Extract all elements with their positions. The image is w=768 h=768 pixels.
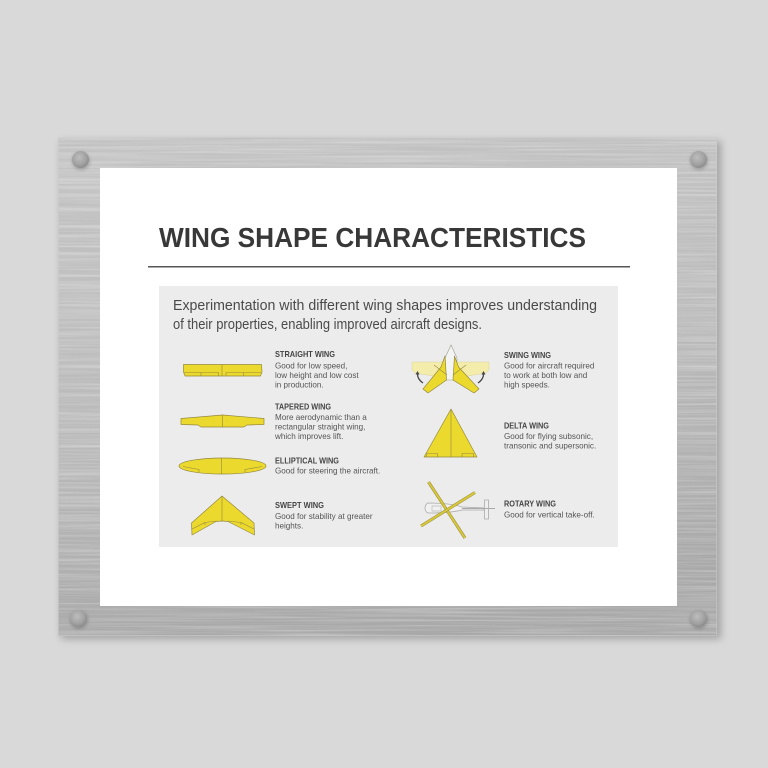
bolt: top right: [690, 151, 708, 170]
icon: rotary wing: [421, 482, 495, 538]
icon: swept wing: [192, 496, 254, 535]
text: tapered wing: which improves lift.: [274, 432, 343, 441]
text: elliptical wing: Good for steering the aircraft.: [275, 466, 380, 476]
bolt: bottom left: [70, 610, 88, 629]
title rule: [148, 266, 630, 268]
icon: tapered wing: [181, 415, 264, 428]
plate shadow: [61, 141, 721, 639]
text: straight wing: in production.: [275, 380, 324, 390]
text: delta wing: DELTA WING: [504, 422, 549, 430]
text: straight wing: STRAIGHT WING: [275, 350, 335, 359]
text: tapered wing: TAPERED WING: [275, 402, 331, 412]
text: delta wing: [504, 422, 596, 450]
text: tapered wing: [274, 402, 367, 441]
text: tapered wing: More aerodynamic than a: [275, 413, 367, 422]
text: straight wing: [275, 350, 359, 390]
bolt: bottom right: [690, 610, 708, 629]
text: rotary wing: ROTARY WING: [504, 500, 556, 508]
icon: straight wing: [184, 364, 262, 376]
icon: elliptical wing: [179, 458, 266, 474]
text: delta wing: Good for flying subsonic,: [504, 432, 593, 441]
text: elliptical wing: [275, 456, 380, 476]
text: swept wing: Good for stability at greater: [275, 512, 373, 521]
intro text: Experimentation with different wing shapes improves understanding: [173, 298, 597, 314]
bolt: top left: [72, 151, 90, 170]
text: swing wing: to work at both low and: [504, 371, 587, 380]
text: tapered wing: rectangular straight wing,: [275, 422, 365, 432]
text: swept wing: [275, 501, 373, 530]
text: swept wing: heights.: [275, 522, 303, 530]
text: delta wing: transonic and supersonic.: [504, 442, 596, 450]
text: swing wing: Good for aircraft required: [504, 362, 594, 370]
text: swing wing: high speeds.: [504, 380, 550, 390]
icon: delta wing: [424, 409, 477, 457]
text: rotary wing: [504, 500, 595, 520]
text: swept wing: SWEPT WING: [275, 501, 324, 510]
intro text: [173, 298, 597, 333]
title: WING SHAPE CHARACTERISTICS: [159, 222, 586, 253]
text: straight wing: Good for low speed,: [275, 362, 347, 370]
text: swing wing: SWING WING: [504, 351, 551, 360]
panel: wing shapes: [159, 286, 618, 547]
text: swing wing: [504, 351, 594, 390]
text: elliptical wing: ELLIPTICAL WING: [275, 456, 339, 466]
text: rotary wing: Good for vertical take-off.: [504, 510, 595, 520]
icon: swing wing: [412, 345, 489, 393]
intro text: of their properties, enabling improved aircraft designs.: [173, 317, 482, 333]
text: straight wing: low height and low cost: [275, 371, 359, 380]
brushed metal plate: [58, 137, 717, 636]
white poster: [100, 168, 677, 606]
